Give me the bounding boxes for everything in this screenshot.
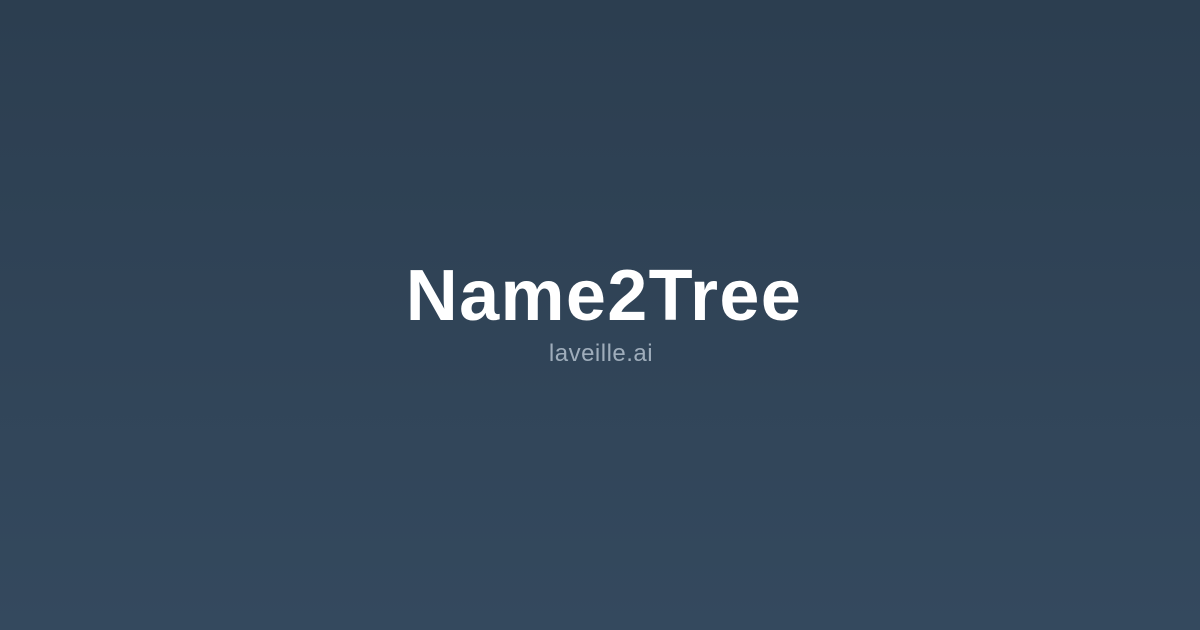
title: Name2Tree [406, 256, 802, 336]
subtitle: laveille.ai [549, 340, 653, 367]
